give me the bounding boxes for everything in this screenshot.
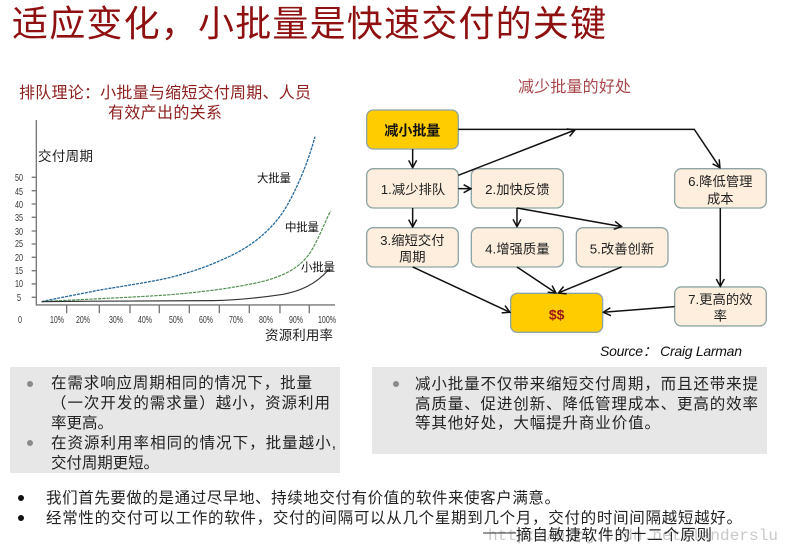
x axis labels: 20%: [76, 314, 90, 326]
panel: left notes: 率更高。: [51, 414, 113, 432]
flowchart arrows: [413, 129, 720, 312]
y axis labels: [15, 172, 23, 326]
box: 1: 1.减少排队: [381, 182, 445, 197]
x axis labels: 10%: [50, 314, 64, 326]
line chart: [15, 120, 336, 343]
chart heading: 有效产出的关系: [108, 104, 222, 122]
x axis labels: 30%: [109, 314, 123, 326]
panel: left notes: 在资源利用率相同的情况下，批量越小,: [51, 434, 336, 452]
x axis labels: 80%: [259, 314, 273, 326]
y axis labels: 20: [15, 252, 23, 264]
y axis title: 交付周期: [38, 148, 93, 164]
agile principles quote: 经常性的交付可以工作的软件，交付的间隔可以从几个星期到几个月，交付的时间间隔越短越好。: [46, 509, 742, 527]
x axis labels: 50%: [169, 314, 183, 326]
box: 3: 周期: [399, 250, 426, 265]
panel: left notes: 在需求响应周期相同的情况下，批量: [51, 373, 312, 392]
box: 3: [367, 228, 458, 267]
x axis labels: 40%: [138, 314, 152, 326]
chart heading: [19, 84, 311, 122]
box: 3: 3.缩短交付: [380, 232, 445, 248]
y axis labels: 5: [17, 292, 21, 304]
box: reduce batch: [367, 110, 458, 149]
x axis title: 资源利用率: [265, 327, 333, 343]
curve: large batch: [42, 137, 315, 302]
box: money: [511, 293, 603, 332]
curve labels: [257, 171, 335, 274]
panel: right notes: [372, 367, 767, 454]
box: 6: [675, 169, 766, 208]
y axis labels: 45: [15, 186, 23, 198]
box: 4: 4.增强质量: [485, 241, 550, 256]
y axis labels: 50: [15, 172, 23, 184]
source credit: Source： Craig Larman: [600, 343, 742, 359]
box: 4: [471, 228, 563, 267]
curve: small batch: [42, 270, 328, 302]
y axis labels: 35: [15, 212, 23, 224]
attribution: 摘自敏捷软件的十二个原则: [516, 526, 712, 544]
box: 2: [471, 169, 563, 208]
agile principles quote: 我们首先要做的是通过尽早地、持续地交付有价值的软件来使客户满意。: [46, 488, 560, 507]
panel: left notes: [10, 367, 340, 473]
panel: left notes: 交付周期更短。: [51, 454, 159, 472]
box: 7: 7.更高的效: [688, 291, 753, 307]
x axis labels: 90%: [289, 314, 303, 326]
box: 7: [675, 287, 766, 326]
box: 6: 6.降低管理: [688, 174, 753, 189]
x axis labels: [50, 314, 336, 326]
y axis labels: 40: [15, 199, 23, 211]
title: 适应变化，小批量是快速交付的关键: [12, 3, 606, 44]
y axis labels: 30: [15, 226, 23, 238]
panel: right notes: 高质量、促进创新、降低管理成本、更高的效率: [415, 395, 758, 413]
box: 7: 率: [714, 308, 727, 324]
box: 2: 2.加快反馈: [485, 182, 550, 197]
curve labels: 大批量: [257, 171, 291, 185]
panel: right notes: 等其他好处，大幅提升商业价值。: [415, 414, 660, 432]
y axis labels: 25: [15, 238, 23, 250]
y axis labels: 15: [15, 265, 23, 277]
box: 5: 5.改善创新: [590, 241, 654, 256]
x axis labels: 100%: [318, 314, 336, 326]
box: reduce batch: 减小批量: [384, 123, 440, 139]
y axis labels: 10: [15, 278, 23, 290]
curve: medium batch: [42, 211, 331, 302]
box: money: $$: [549, 306, 565, 322]
curve labels: 中批量: [285, 220, 319, 234]
curve labels: 小批量: [301, 260, 335, 274]
x axis labels: 60%: [199, 314, 213, 326]
panel: benefits flowchart: [367, 78, 766, 359]
box: 1: [367, 169, 458, 208]
box: 5: [576, 228, 668, 267]
panel: queueing theory chart: [15, 84, 336, 343]
x axis labels: 70%: [229, 314, 243, 326]
chart heading: 排队理论：小批量与缩短交付周期、人员: [19, 84, 311, 102]
panel: left notes: （一次开发的需求量）越小，资源利用: [51, 394, 330, 412]
box: 6: 成本: [707, 191, 734, 206]
flowchart boxes: [367, 110, 766, 332]
y axis labels: 0: [18, 314, 22, 326]
watermark: http://blog.csdn.net/landerslu: [488, 527, 778, 545]
panel: right notes: 减小批量不仅带来缩短交付周期，而且还带来提: [415, 375, 758, 393]
agile principles quote: [18, 488, 742, 527]
flowchart heading: 减少批量的好处: [518, 78, 631, 96]
chart axes: [32, 120, 335, 313]
